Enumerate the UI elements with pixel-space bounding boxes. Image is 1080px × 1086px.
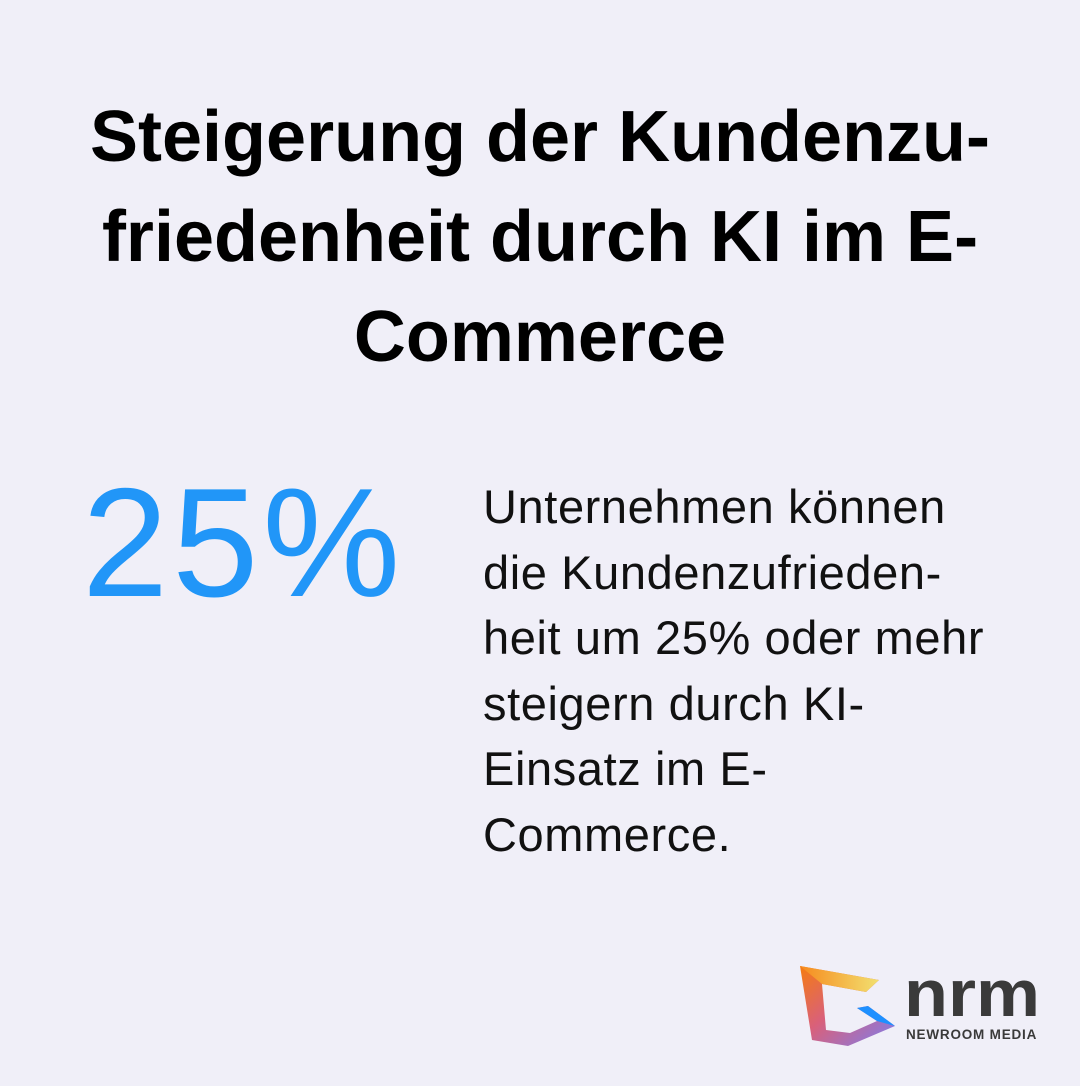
- description text: [483, 480, 984, 860]
- big number: 25%: [82, 456, 404, 629]
- logo: newroom media: [800, 960, 1040, 1046]
- description text: Commerce.: [483, 808, 731, 860]
- description text: steigern durch KI-: [483, 676, 865, 730]
- description text: die Kundenzufrieden-: [483, 546, 942, 598]
- title: Commerce: [354, 297, 726, 377]
- description text: heit um 25% oder mehr: [483, 611, 984, 664]
- title: [90, 97, 990, 377]
- title: friedenheit durch KI im E-: [102, 197, 978, 277]
- logo: newroom media: NEWROOM MEDIA: [906, 1027, 1037, 1042]
- description text: Unternehmen können: [483, 480, 946, 533]
- description text: Einsatz im E-: [483, 742, 768, 795]
- title: Steigerung der Kundenzu-: [90, 97, 990, 177]
